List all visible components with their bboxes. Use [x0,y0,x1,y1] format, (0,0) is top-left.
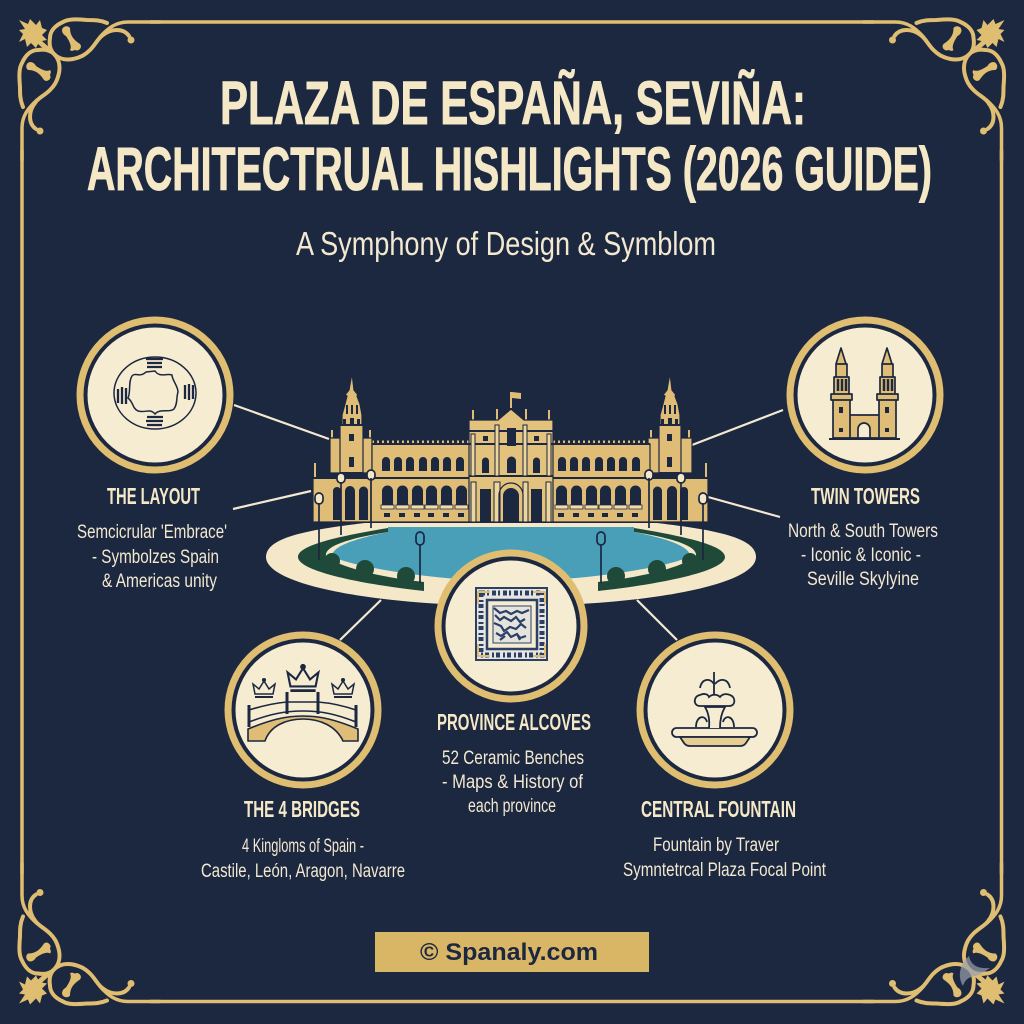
bushes [324,553,698,585]
icon: ceramic tile [438,553,584,699]
panel: the layout [77,320,230,592]
description: 52 Ceramic Benches [442,748,584,769]
icon: fountain [640,635,790,785]
description [623,835,827,881]
reflecting pool [332,527,690,581]
description: Semcicrular 'Embrace' [77,522,227,543]
panel: the 4 bridges [201,635,405,882]
footer badge [375,932,649,972]
description [201,836,405,882]
side wings [330,438,692,473]
towers [340,373,681,473]
footer badge: © Spanaly.com [420,939,598,966]
icon: twin towers [790,320,940,470]
panel: twin towers [788,320,940,590]
finials [315,392,706,478]
description: Castile, León, Aragon, Navarre [201,861,405,882]
panel: province alcoves [437,553,591,817]
panel: central fountain [623,635,827,881]
description [442,748,584,817]
connector lines [233,405,783,640]
description [788,521,938,590]
plaza ground [266,523,756,606]
heading: TWIN TOWERS [811,483,920,509]
hedge borders [298,528,725,591]
icon: bridge and crowns [228,635,378,785]
heading: THE LAYOUT [107,483,200,509]
palace windows and arches [333,405,688,522]
description: Symntetrcal Plaza Focal Point [623,860,827,881]
description: - Maps & History of [442,772,584,793]
description: - Symbolzes Spain [92,547,219,568]
street lamps [315,470,707,583]
central pavilion [469,409,553,522]
icon: embracing hands [80,320,230,470]
subtitle: A Symphony of Design & Symblom [296,225,716,262]
heading: CENTRAL FOUNTAIN [641,796,796,822]
description: Fountain by Traver [653,835,780,856]
description: North & South Towers [788,521,938,542]
heading: THE 4 BRIDGES [244,796,360,822]
galleries [372,444,650,478]
heading: PROVINCE ALCOVES [437,709,591,735]
description: 4 Kingloms of Spain - [242,836,364,857]
flag [512,392,521,399]
description: & Americas unity [102,571,217,592]
title [87,69,932,203]
description: Seville Skylyine [807,569,919,590]
sills [381,505,642,509]
description: - Iconic & Iconic - [801,545,921,566]
balustrades [372,440,650,444]
palace building [313,373,708,522]
plaza illustration [266,373,756,606]
description: each province [468,796,556,817]
description [77,522,227,592]
